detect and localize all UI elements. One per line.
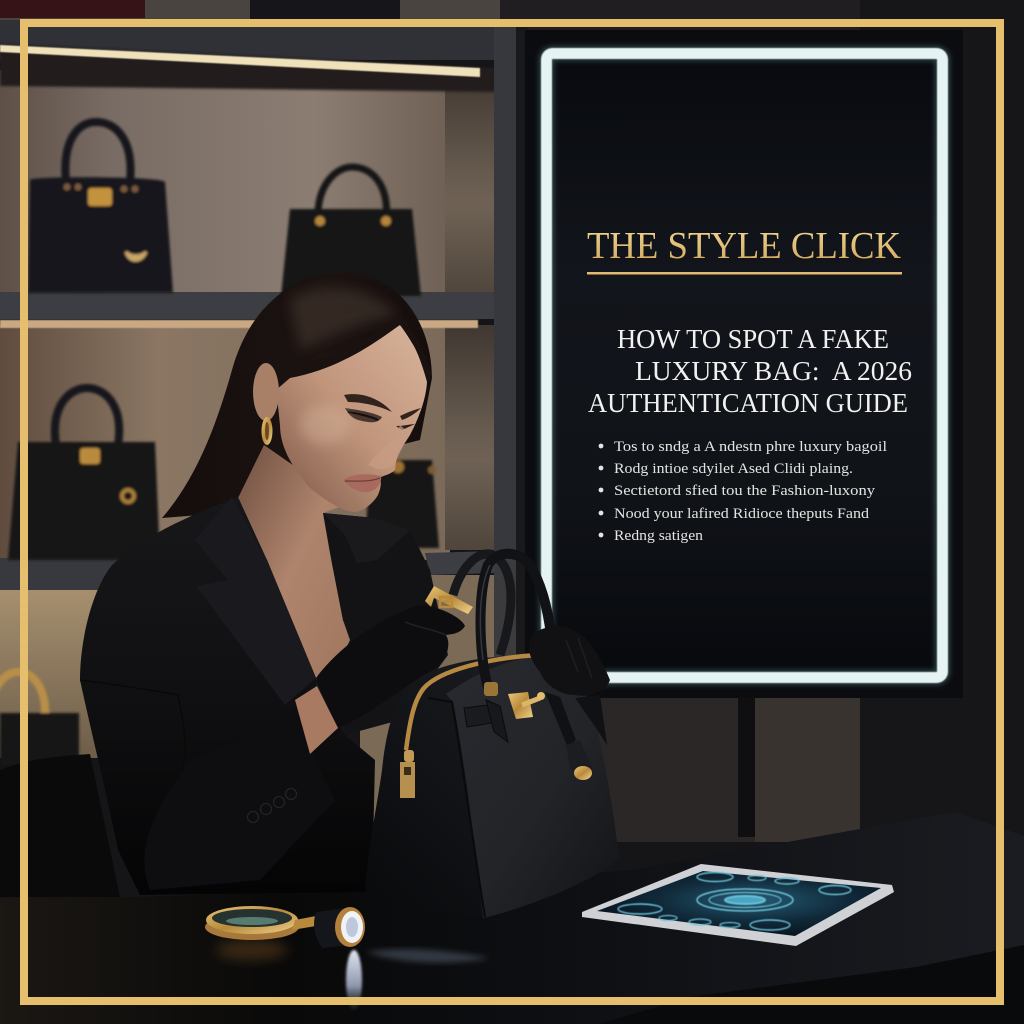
zipper pull [400,750,415,798]
back handle [453,554,511,655]
blazer lapel right [323,513,410,563]
screen glow [546,54,942,678]
panel: glowing display screen [525,30,963,698]
inspected bag [365,554,619,918]
heading: AUTHENTICATION GUIDE [588,388,908,418]
bullet list: Tos to sndg a A ndestn phre luxury bagoil [614,439,887,455]
heading: HOW TO SPOT A FAKE [617,324,889,354]
chair [0,754,120,897]
forearm skin [295,686,338,754]
nose shadow [368,425,408,469]
gold lock [508,692,545,719]
left glove with gold key [316,586,473,727]
shelf light strip: middle [0,320,478,328]
hair over forehead [262,315,432,390]
heading: LUXURY BAG: A 2026 [635,356,912,386]
shelf bag: behind woman [365,460,439,548]
seam [428,698,485,917]
magnifying glass [205,906,316,940]
screen light border [546,54,942,678]
flashlight [314,907,365,948]
woman [80,272,448,895]
blazer lapel left [195,497,316,705]
hair shine [290,288,398,350]
desk [0,812,1024,1024]
strap [464,704,498,727]
shelf bag: top centre [281,167,421,296]
zipper [406,655,537,750]
bag front panel [446,656,619,918]
tablet [582,864,894,946]
shelf bag: lower left [0,672,79,765]
eyes [345,408,382,422]
eyebrows [344,394,392,412]
right strap and clochette [545,692,607,780]
bullet list: Sectietord sfied tou the Fashion-luxony [614,483,876,499]
gold ring on handle [484,682,498,696]
blazer [80,497,448,895]
desk light reflections [216,940,490,1010]
bullet list: Rodg intioe sdyilet Ased Clidi plaing. [614,461,853,477]
bullet list: Nood your lafired Ridioce theputs Fand [614,506,870,522]
screen stand post [738,697,755,837]
shelf bag: middle left [8,388,160,560]
earring [262,417,272,445]
sleeve fold [80,680,185,770]
bullet list: Redng satigen [614,528,704,544]
lips [343,474,381,492]
neck and chest [238,445,352,680]
bullet list [599,439,887,544]
heading [588,324,912,418]
bag body [365,655,619,918]
ear [253,363,279,421]
shelf light strip: top [0,45,480,77]
cheek highlight [300,405,350,445]
gold key [425,586,473,614]
face [262,315,432,512]
panel: display shelves [0,20,528,825]
brand title: THE STYLE CLICK [587,225,902,267]
tablet HUD rings [618,872,851,930]
shelf bag: top left [28,122,173,293]
front handle [480,554,551,688]
right glove [529,626,610,696]
hair back [162,272,432,518]
sleeve buttons [248,788,296,822]
